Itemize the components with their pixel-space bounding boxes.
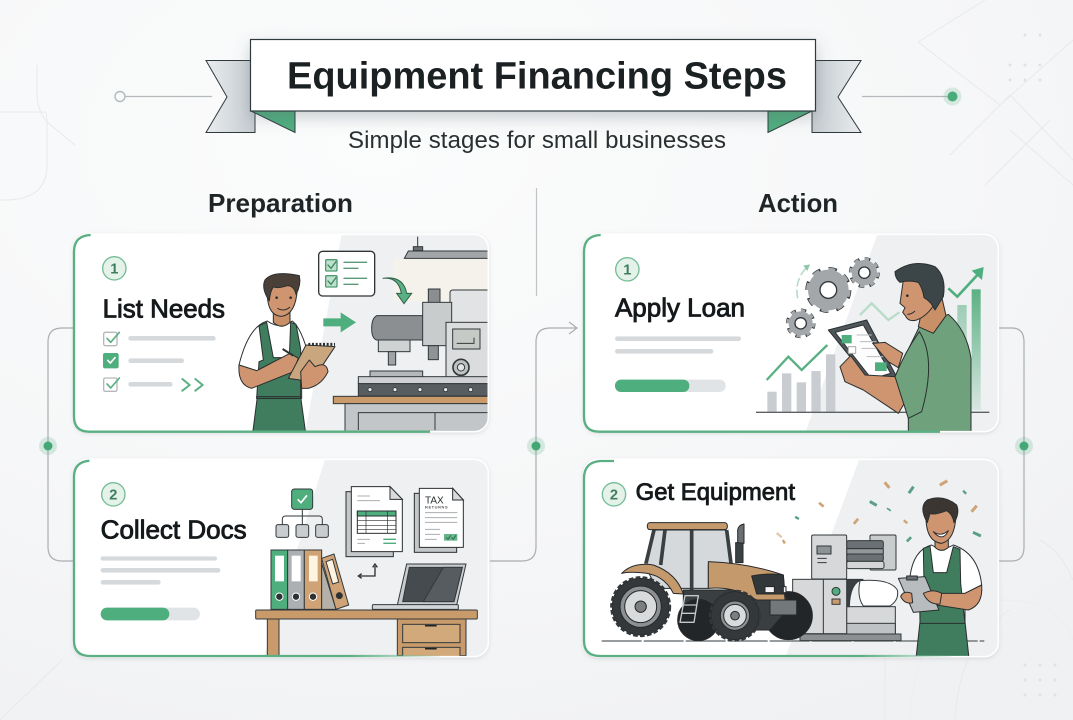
text placeholder bars [615, 336, 741, 354]
number badge: 1 [623, 263, 631, 279]
panel: Collect Docs: RETURNS [425, 505, 448, 510]
illustration: printing machine [793, 535, 901, 641]
card title: List Needs [103, 294, 225, 324]
title ribbon [206, 40, 861, 132]
chart: bars and trend [756, 267, 989, 412]
arrow: to machine [323, 312, 356, 332]
icon: org chart [276, 489, 328, 537]
number badge [103, 257, 126, 280]
illustration: worker with clipboard [898, 498, 982, 658]
panel: List Needs [74, 234, 492, 433]
number badge: 2 [109, 488, 117, 504]
title: Equipment Financing Steps [287, 56, 787, 98]
connector: top right ornament [862, 88, 962, 106]
subtitle: Simple stages for small businesses [348, 127, 726, 154]
illustration: tractor [611, 523, 812, 641]
number badge [102, 483, 125, 506]
icon: checklist card [319, 251, 375, 296]
illustration: worker with notepad [239, 274, 335, 433]
connector: top left ornament [115, 92, 212, 102]
heading: Preparation: Preparation [208, 188, 353, 218]
connector: right [999, 328, 1033, 561]
card edge [584, 234, 998, 432]
icon: spreadsheet document [346, 487, 402, 557]
illustration: machine [333, 237, 492, 432]
card edge [584, 459, 998, 657]
checklist [103, 332, 216, 391]
card title: Get Equipment [636, 479, 795, 506]
progress bar [615, 380, 726, 392]
panel: Apply Loan [584, 234, 1000, 433]
arrow: curved down [383, 278, 412, 304]
illustration: desk [256, 610, 477, 657]
text placeholder bars [101, 556, 220, 585]
icon: tax returns document [414, 488, 463, 552]
arrow: small exchange [358, 564, 377, 578]
panel: Get Equipment [584, 459, 1000, 658]
card title: Apply Loan [615, 293, 745, 323]
number badge [602, 483, 626, 506]
progress bar [101, 608, 200, 620]
icon: gears [788, 259, 878, 336]
card edge [74, 234, 488, 432]
connector: left [39, 328, 74, 561]
card edge [74, 459, 488, 657]
illustration: person with tablet [828, 263, 971, 433]
connector: centre arrow [490, 188, 577, 561]
number badge: 1 [110, 262, 118, 278]
panel: Collect Docs [74, 459, 490, 658]
heading: Action: Action [758, 188, 838, 218]
panel: Collect Docs: TAX [425, 495, 444, 506]
number badge: 2 [610, 488, 618, 504]
illustration: laptop [372, 564, 466, 609]
number badge [616, 258, 639, 281]
card title: Collect Docs [101, 514, 247, 544]
icon: confetti [776, 480, 981, 544]
illustration: binders [271, 550, 349, 609]
